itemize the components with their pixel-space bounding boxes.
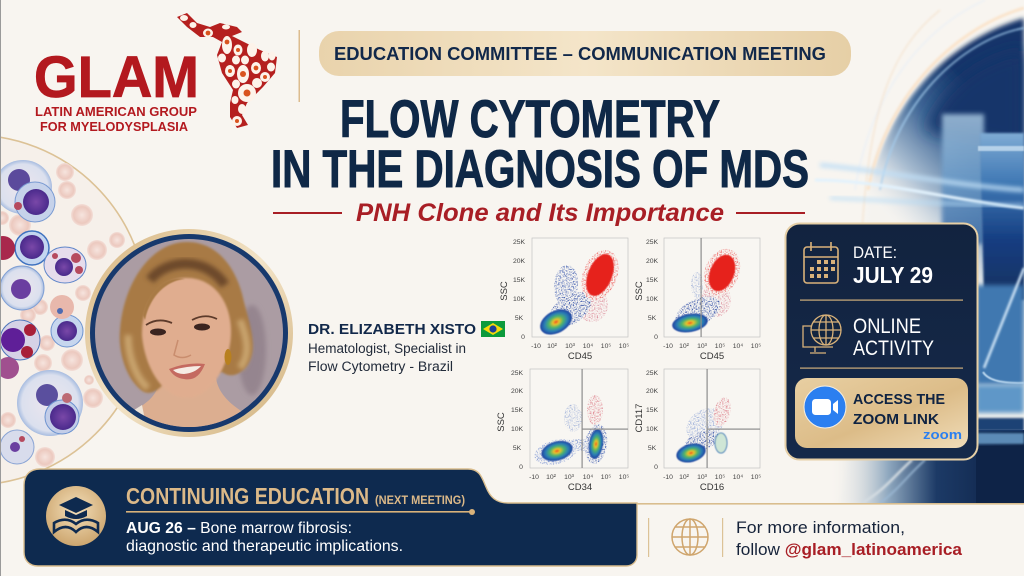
plot: SSC vs CD34: 10⁴ xyxy=(583,474,593,481)
plot: CD117 vs CD16: CD16 xyxy=(700,482,724,493)
meeting pill xyxy=(319,31,851,76)
plot: SSC vs CD45 gated: -10 xyxy=(663,343,673,350)
plot: SSC vs CD45 gated: 0 xyxy=(654,334,658,341)
plot: SSC vs CD34: 15K xyxy=(511,407,524,414)
title: IN THE DIAGNOSIS OF MDS xyxy=(271,140,809,199)
plot: SSC vs CD34: 10² xyxy=(546,474,557,481)
plot: SSC vs CD45 gated: 10⁵ xyxy=(751,343,761,350)
plot: SSC vs CD45: CD45 xyxy=(568,351,592,362)
icon: globe xyxy=(672,519,708,555)
panel: event details xyxy=(786,224,978,460)
speaker details: DR. ELIZABETH XISTO xyxy=(308,322,476,338)
zoom button: ZOOM LINK xyxy=(853,411,939,428)
next meeting text: AUG 26 – Bone marrow fibrosis: xyxy=(126,520,352,537)
plot: CD117 vs CD16: 10² xyxy=(679,474,690,481)
flask body xyxy=(976,268,1024,503)
next meeting text xyxy=(126,520,403,555)
plot: SSC vs CD45 gated: 10² xyxy=(679,343,690,350)
tagline xyxy=(35,104,197,134)
footer: more information xyxy=(648,518,963,559)
plot: SSC vs CD45: 10³ xyxy=(565,343,576,350)
online activity: ACTIVITY xyxy=(853,337,934,360)
plot: CD117 vs CD16: 25K xyxy=(646,370,659,377)
plot: SSC vs CD45 gated: 5K xyxy=(648,315,657,322)
plot: SSC vs CD45: 0 xyxy=(521,334,525,341)
plot: SSC vs CD45 gated: 10³ xyxy=(697,343,708,350)
footer rule xyxy=(500,503,1024,505)
plot: SSC vs CD45 gated: 10K xyxy=(646,296,659,303)
plot: SSC vs CD34 xyxy=(496,369,629,493)
speaker details: Flow Cytometry - Brazil xyxy=(308,359,453,374)
heading: CONTINUING EDUCATION xyxy=(126,483,369,509)
eyes xyxy=(150,328,166,336)
background: cell lens xyxy=(0,135,147,485)
online activity: ONLINE xyxy=(853,315,921,338)
footer: more information: For more information, xyxy=(736,518,905,537)
online activity xyxy=(853,315,934,360)
wordmark: GLAM xyxy=(34,45,199,110)
icon: Brazil flag xyxy=(481,321,505,337)
plot: SSC vs CD34: 10K xyxy=(511,426,524,433)
plot: SSC vs CD45 gated: 25K xyxy=(646,239,659,246)
red blood cells xyxy=(0,163,125,467)
plot: SSC vs CD45 gated xyxy=(634,238,761,362)
earring xyxy=(224,349,232,365)
icon: globe and monitor xyxy=(803,315,841,353)
logo: GLAM xyxy=(34,13,277,134)
plot: SSC vs CD34: SSC xyxy=(496,412,507,432)
title: FLOW CYTOMETRY xyxy=(340,90,720,149)
map of Latin America xyxy=(177,13,277,128)
background: laboratory scene xyxy=(815,0,1024,503)
plot: CD117 vs CD16: 10³ xyxy=(697,474,708,481)
plot: SSC vs CD45: 5K xyxy=(515,315,524,322)
footer: more information: follow @glam_latinoamerica xyxy=(736,540,963,559)
white blood cells xyxy=(0,160,86,464)
heading: (NEXT MEETING) xyxy=(375,495,465,507)
hair xyxy=(120,242,253,393)
plot: SSC vs CD34: 5K xyxy=(513,445,522,452)
plot: SSC vs CD45: 25K xyxy=(513,239,526,246)
plot: SSC vs CD34: -10 xyxy=(529,474,539,481)
plot: CD117 vs CD16: 15K xyxy=(646,407,659,414)
plot: SSC vs CD34: 10⁵ xyxy=(601,474,611,481)
plot: SSC vs CD34: 10⁵ xyxy=(619,474,629,481)
plot: SSC vs CD45 gated: 10⁴ xyxy=(733,343,743,350)
face xyxy=(142,278,231,398)
plot: CD117 vs CD16: 10⁵ xyxy=(751,474,761,481)
plot: CD117 vs CD16: CD117 xyxy=(634,404,645,432)
plot: SSC vs CD34: 20K xyxy=(511,388,524,395)
shoulders xyxy=(135,378,242,427)
plot: CD117 vs CD16 xyxy=(634,369,761,493)
icon: graduation badge xyxy=(46,486,106,546)
plot: SSC vs CD45 gated: CD45 xyxy=(700,351,724,362)
mouth xyxy=(169,364,205,379)
meeting pill: EDUCATION COMMITTEE – COMMUNICATION MEETING xyxy=(334,44,826,64)
tagline: FOR MYELODYSPLASIA xyxy=(40,119,189,134)
plot: SSC vs CD45 gated: 10⁵ xyxy=(715,343,725,350)
divider xyxy=(298,30,300,102)
plot: CD117 vs CD16: -10 xyxy=(663,474,673,481)
plot: SSC vs CD45 gated: 20K xyxy=(646,258,659,265)
plot: SSC vs CD45: 20K xyxy=(513,258,526,265)
plot: SSC vs CD45: SSC xyxy=(499,281,510,301)
speaker details: Hematologist, Specialist in xyxy=(308,341,466,356)
icon: zoom camera xyxy=(804,386,846,428)
plot: SSC vs CD45 xyxy=(499,238,629,362)
plot: CD117 vs CD16: 10⁴ xyxy=(733,474,743,481)
plot: SSC vs CD34: CD34 xyxy=(568,482,592,493)
plot: SSC vs CD45: 10² xyxy=(547,343,558,350)
flask xyxy=(980,133,1024,300)
tagline: LATIN AMERICAN GROUP xyxy=(35,104,197,119)
speaker portrait xyxy=(85,229,293,440)
date: DATE: xyxy=(853,244,897,262)
plot: SSC vs CD45 gated: 15K xyxy=(646,277,659,284)
date: JULY 29 xyxy=(853,262,933,288)
panel: continuing education xyxy=(24,469,637,566)
speaker details xyxy=(308,321,505,374)
plot: SSC vs CD34: 10³ xyxy=(564,474,575,481)
next meeting text: diagnostic and therapeutic implications. xyxy=(126,538,403,555)
plot: SSC vs CD34: 25K xyxy=(511,370,524,377)
plot: CD117 vs CD16: 20K xyxy=(646,388,659,395)
zoom button xyxy=(795,378,968,448)
subtitle: PNH Clone and Its Importance xyxy=(356,199,724,227)
zoom button: ACCESS THE xyxy=(853,391,945,408)
plot: CD117 vs CD16: 0 xyxy=(654,464,658,471)
plot: CD117 vs CD16: 10K xyxy=(646,426,659,433)
plot: SSC vs CD45: 10K xyxy=(513,296,526,303)
plot: SSC vs CD45: -10 xyxy=(531,343,541,350)
zoom button: zoom xyxy=(923,427,962,442)
test tube xyxy=(942,114,984,244)
icon: calendar xyxy=(804,242,838,283)
plot: CD117 vs CD16: 5K xyxy=(648,445,657,452)
plot: SSC vs CD45: 15K xyxy=(513,277,526,284)
plot: SSC vs CD45 gated: SSC xyxy=(634,281,645,301)
plot: SSC vs CD45: 10⁵ xyxy=(601,343,611,350)
plot: SSC vs CD34: 0 xyxy=(519,464,523,471)
plot: CD117 vs CD16: 10⁵ xyxy=(715,474,725,481)
date xyxy=(853,244,933,288)
plot: SSC vs CD45: 10⁵ xyxy=(619,343,629,350)
title xyxy=(271,90,809,199)
plot: SSC vs CD45: 10⁴ xyxy=(583,343,593,350)
